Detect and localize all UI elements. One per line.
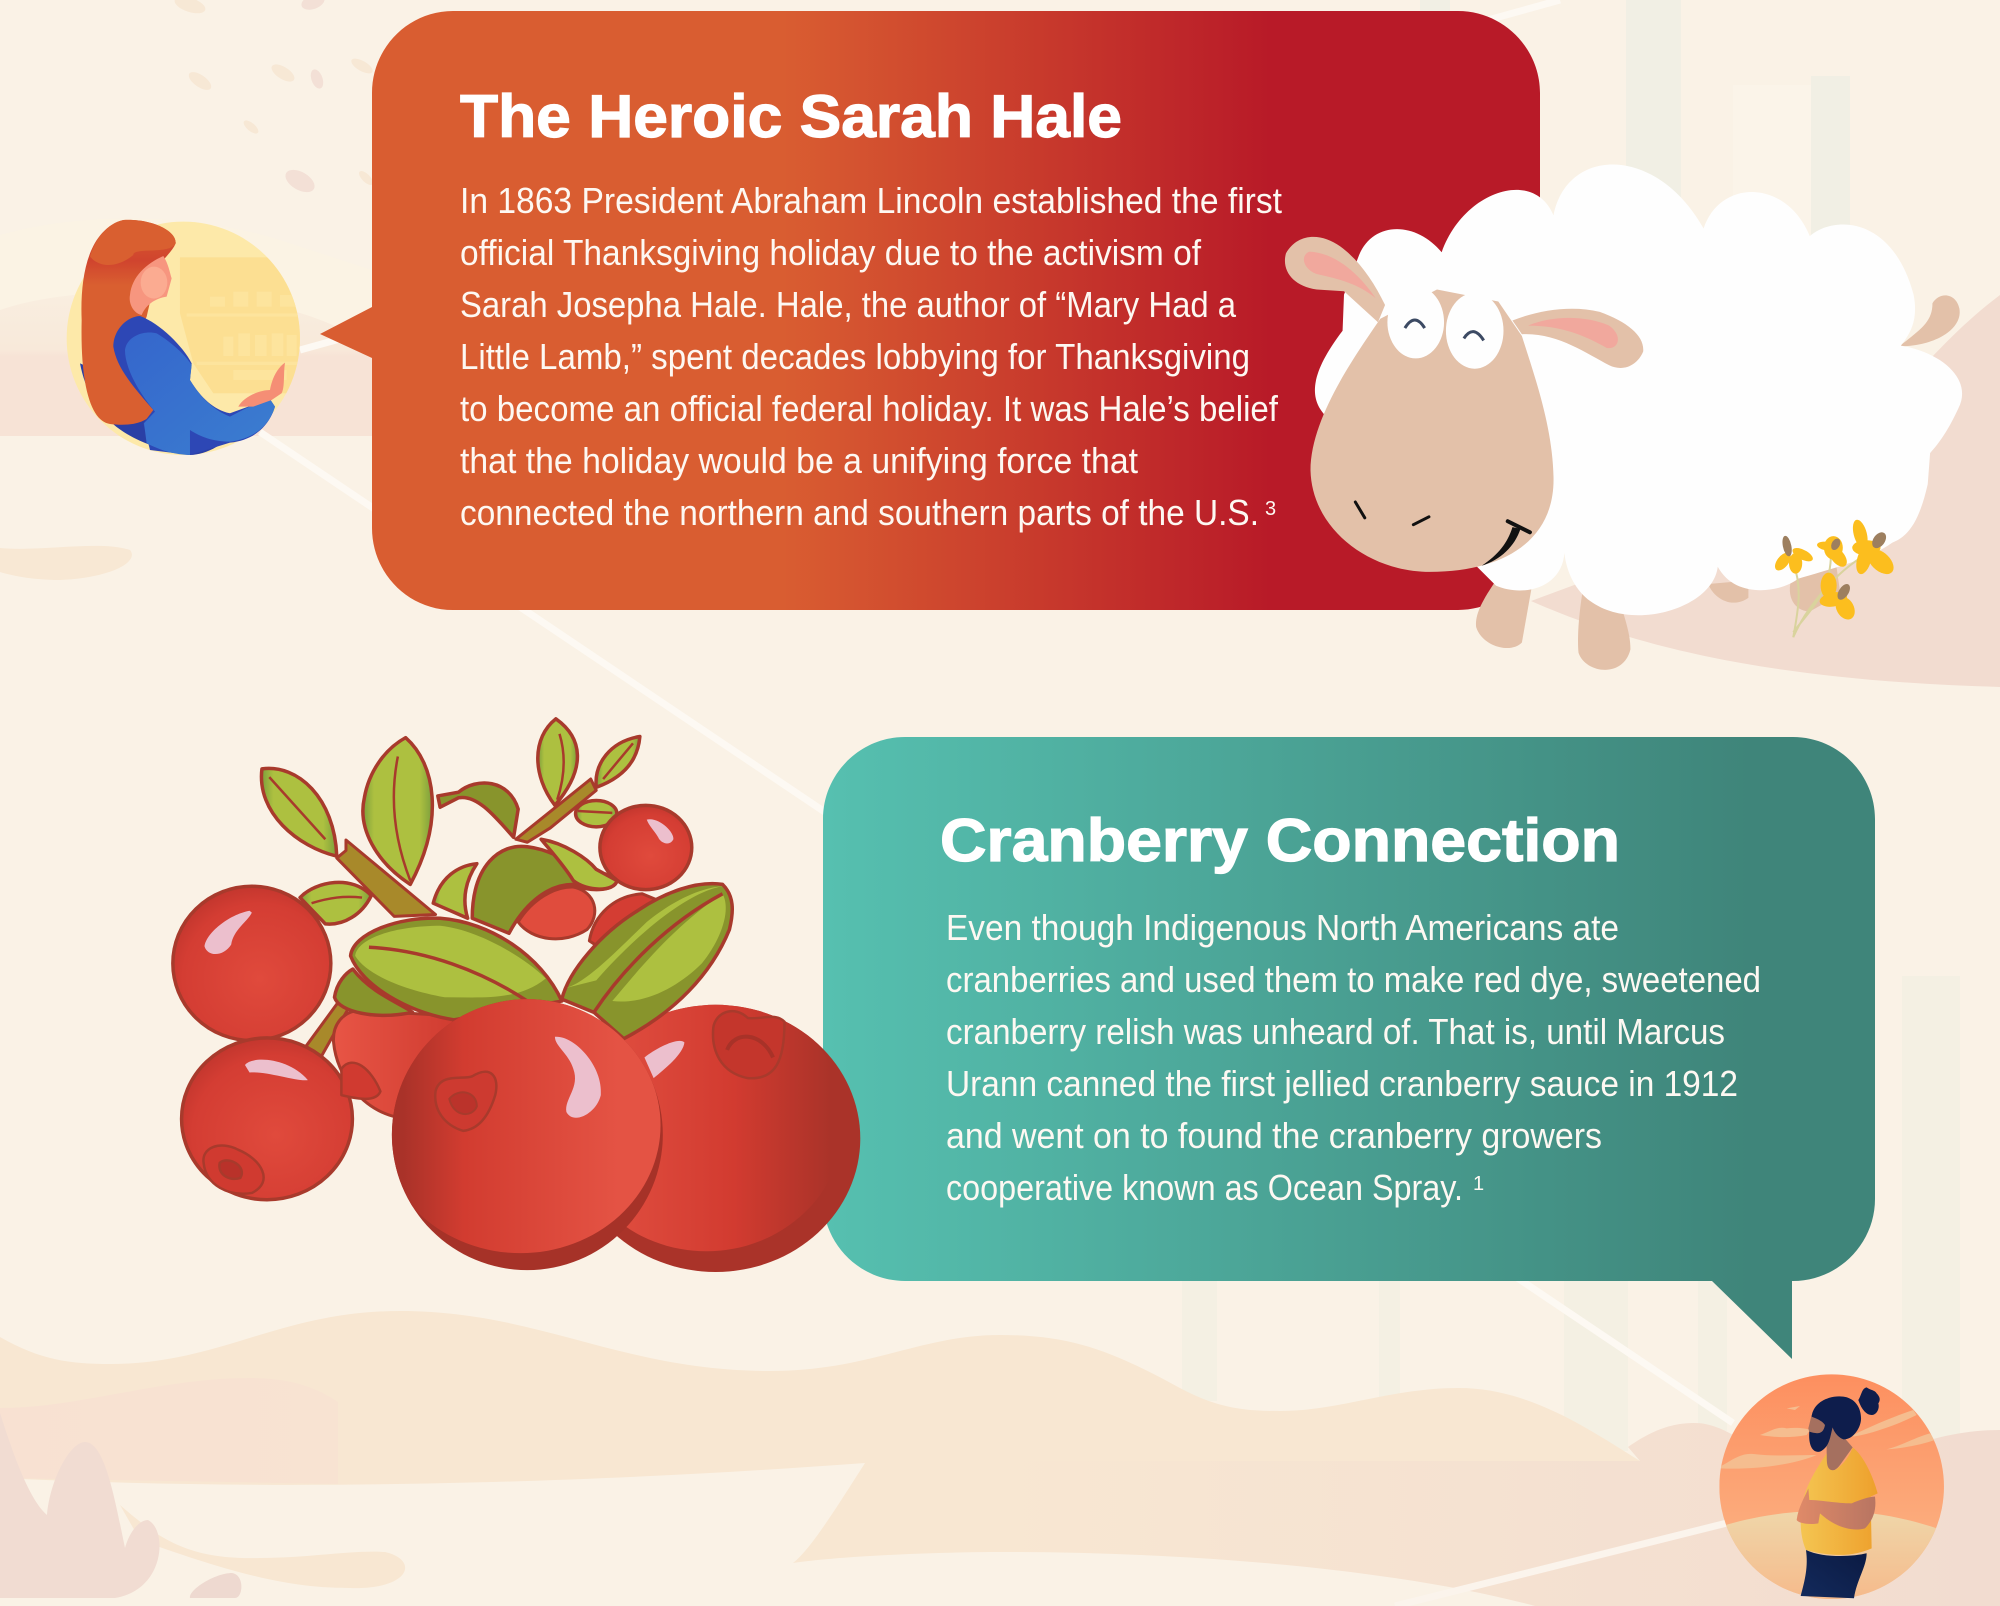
body text: 3 [1265, 498, 1276, 520]
panel: Cranberry Connection [823, 737, 1875, 1359]
icon: sheep [1285, 164, 1962, 670]
sunset circle [1719, 1373, 1947, 1603]
icon: woman at shelves [67, 220, 300, 455]
left ear [1285, 237, 1385, 322]
body text: connected the northern and southern parts of the U.S. [460, 492, 1259, 533]
body text: cooperative known as Ocean Spray. [946, 1167, 1463, 1208]
neck and face [1808, 1415, 1853, 1471]
body text: Sarah Josepha Hale. Hale, the author of “Mary Had a [460, 284, 1237, 325]
top leaves [261, 719, 640, 924]
speech bubble [823, 737, 1875, 1359]
ponytail [1858, 1387, 1880, 1415]
body text: and went on to found the cranberry growers [946, 1115, 1602, 1156]
falling leaves [173, 0, 375, 197]
eyes [1387, 286, 1504, 369]
body text [946, 907, 1761, 1208]
icon: cranberries [173, 719, 860, 1272]
small berry, top right [600, 805, 692, 890]
highlights [205, 819, 684, 1118]
nose and smile [1355, 502, 1530, 566]
heading: Cranberry Connection [940, 807, 1620, 874]
panel: The Heroic Sarah Hale [320, 11, 1540, 610]
body text: Urann canned the first jellied cranberry sauce in 1912 [946, 1063, 1738, 1104]
dark centre leaf [472, 846, 617, 933]
body text: official Thanksgiving holiday due to the activism of [460, 232, 1202, 273]
body text: Little Lamb,” spent decades lobbying for Thanksgiving [460, 336, 1250, 377]
head [1310, 289, 1554, 572]
right ear [1512, 309, 1643, 368]
body text: that the holiday would be a unifying force that [460, 440, 1138, 481]
body text: to become an official federal holiday. It was Hale’s belief [460, 388, 1279, 429]
body text: cranberries and used them to make red dye, sweetened [946, 959, 1761, 1000]
body text: Even though Indigenous North Americans ate [946, 907, 1619, 948]
hair and beard [1809, 1396, 1861, 1452]
shirt [1801, 1447, 1878, 1555]
legs and tail [1476, 295, 1960, 670]
round berry, upper left [173, 886, 331, 1041]
speech bubble [320, 11, 1540, 610]
front leaves [334, 884, 732, 1039]
body text [460, 180, 1282, 533]
flowers [1772, 519, 1899, 637]
round berry, lower left [182, 1038, 352, 1200]
small berries under leaves [518, 887, 665, 948]
body text: cranberry relish was unheard of. That is, until Marcus [946, 1011, 1725, 1052]
wool body [1315, 164, 1962, 615]
stems [306, 779, 596, 1057]
heading: The Heroic Sarah Hale [460, 83, 1122, 150]
large berry, centre [380, 997, 663, 1270]
icon: man with crossed arms [1719, 1373, 1947, 1603]
arms [1797, 1488, 1875, 1529]
light rays [260, 0, 1733, 1423]
trousers [1801, 1550, 1867, 1598]
body text: 1 [1473, 1173, 1484, 1195]
bottom landscape [0, 1311, 2000, 1606]
back left berry [333, 1010, 458, 1118]
body text: In 1863 President Abraham Lincoln established the first [460, 180, 1282, 221]
blossom ends [203, 1063, 380, 1194]
large berry, right [617, 1004, 860, 1272]
